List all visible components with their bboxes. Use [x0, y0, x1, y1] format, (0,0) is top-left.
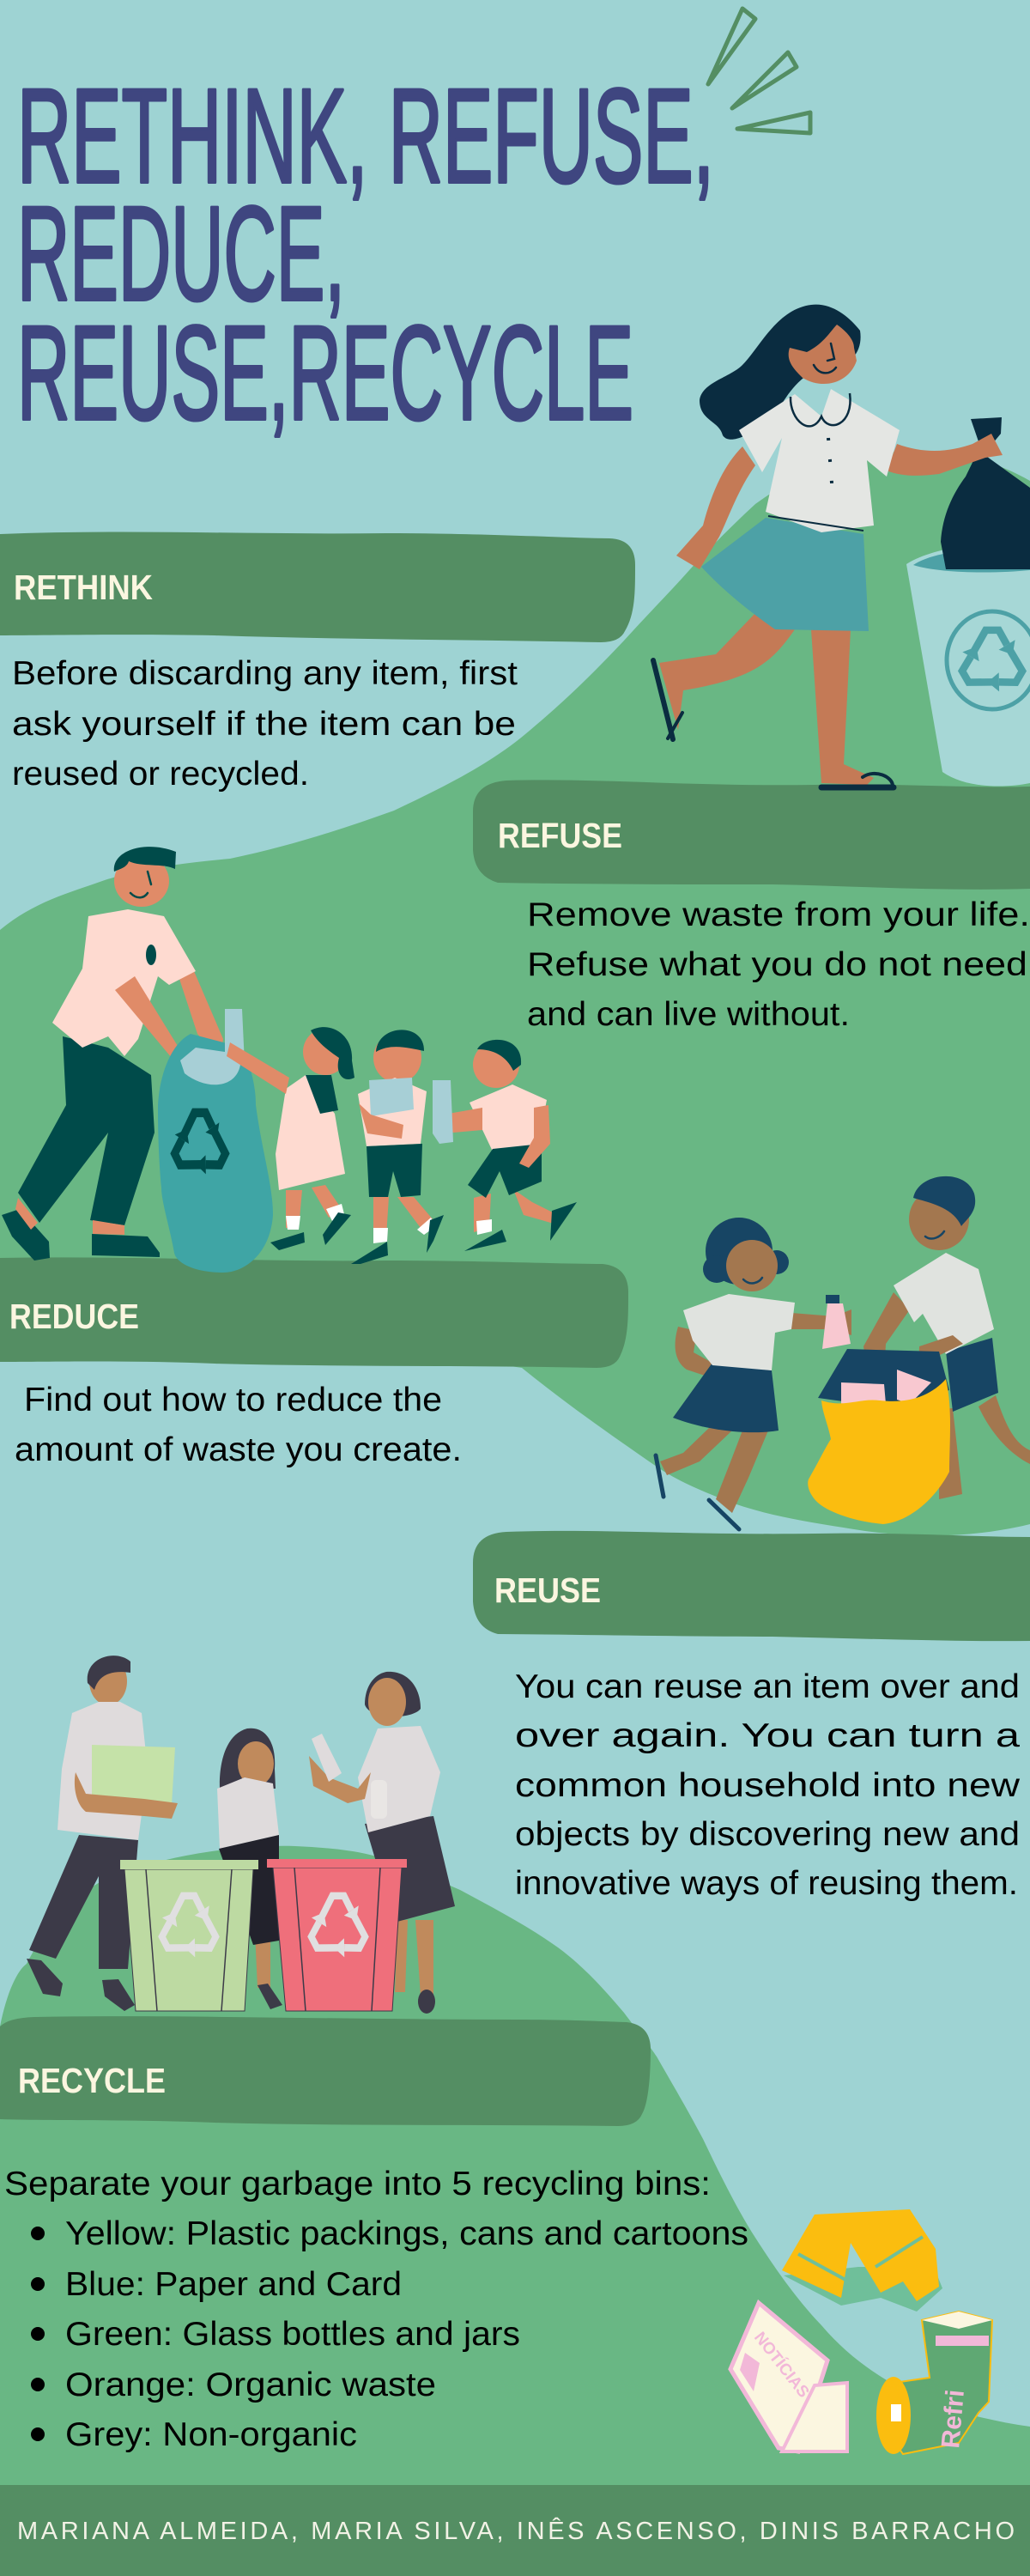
reduce label: REDUCE	[9, 1297, 139, 1336]
rethink text: reused or recycled.	[12, 756, 309, 793]
rethink bar	[0, 532, 635, 642]
panel: refuse	[473, 780, 1030, 1033]
panel: reduce	[0, 1257, 628, 1468]
illustration: children filling yellow bag	[656, 1176, 1030, 1529]
bullet list of bins: Green: Glass bottles and jars	[65, 2316, 520, 2353]
refuse text: Refuse what you do not need	[527, 946, 1027, 983]
girl	[656, 1218, 851, 1529]
recycle label: RECYCLE	[18, 2061, 166, 2100]
reuse text: common household into new	[515, 1767, 1021, 1804]
reuse text: innovative ways of reusing them.	[515, 1865, 1018, 1902]
boy	[863, 1176, 1030, 1499]
bullet list of bins: Yellow: Plastic packings, cans and cartoons	[65, 2215, 748, 2252]
rethink label: RETHINK	[14, 568, 153, 607]
illustration: people sorting into bins	[27, 1656, 455, 2014]
illustration: girl with trash bag and bin	[653, 305, 1030, 787]
yellow bottle	[782, 2209, 942, 2312]
title	[17, 62, 714, 448]
green hill: upper	[0, 451, 1030, 1535]
man	[2, 847, 223, 1261]
refuse text	[527, 896, 1030, 1033]
green bin	[120, 1860, 258, 2011]
reduce text	[15, 1382, 462, 1468]
reuse text: You can reuse an item over and	[515, 1668, 1020, 1705]
girl child	[227, 1027, 354, 1250]
small girl	[217, 1728, 282, 2009]
refuse text: and can live without.	[527, 996, 850, 1033]
red bin	[267, 1859, 407, 2011]
bullet list of bins: Orange: Organic waste	[65, 2366, 436, 2403]
reduce text: amount of waste you create.	[15, 1431, 462, 1468]
woman	[309, 1672, 455, 2014]
recycle bar	[0, 2016, 651, 2126]
panel: reuse	[473, 1531, 1030, 1902]
reuse text	[515, 1668, 1021, 1902]
recycling bin	[906, 543, 1030, 787]
newspaper: NOTÍCIAS	[750, 2329, 813, 2402]
panel: rethink	[0, 532, 635, 793]
bullet list of bins	[31, 2215, 748, 2453]
illustration: crushed bottle, newspaper and can	[730, 2209, 992, 2454]
skirt	[701, 518, 869, 631]
newspaper	[730, 2303, 847, 2451]
boy child with bottles	[351, 1030, 444, 1264]
panel: recycle	[0, 2016, 748, 2453]
boy child running	[433, 1040, 577, 1251]
title: REDUCE,	[17, 179, 345, 329]
blouse	[739, 389, 900, 532]
sandals	[653, 660, 894, 787]
bullet list of bins: Blue: Paper and Card	[65, 2266, 402, 2303]
yellow bag	[808, 1349, 950, 1524]
face	[814, 343, 836, 373]
hair	[700, 305, 861, 440]
pink bottle	[822, 1303, 851, 1349]
rethink text: Before discarding any item, first	[12, 655, 518, 692]
trash bag	[941, 417, 1030, 569]
soda can: Refri	[936, 2389, 970, 2450]
head	[789, 325, 857, 384]
limbs	[659, 613, 795, 730]
authors credit: MARIANA ALMEIDA, MARIA SILVA, INÊS ASCENSO, DINIS BARRACHO	[17, 2517, 1015, 2545]
refuse text: Remove waste from your life.	[527, 896, 1030, 933]
green hill: lower	[0, 1846, 1030, 2485]
reduce bar	[0, 1257, 628, 1368]
man with papers	[27, 1656, 178, 2011]
illustration: man and children collecting bottles	[2, 847, 577, 1273]
teal recycling bag	[158, 1009, 273, 1273]
icon: title sparks	[708, 9, 810, 133]
reuse text: objects by discovering new and	[515, 1816, 1020, 1853]
soda can	[876, 2312, 992, 2454]
reuse label: REUSE	[494, 1571, 601, 1610]
reduce text: Find out how to reduce the	[24, 1382, 442, 1419]
footer bar	[0, 2485, 1030, 2576]
refuse label: REFUSE	[498, 816, 622, 855]
rethink text: ask yourself if the item can be	[12, 706, 516, 743]
reuse bar	[473, 1531, 1030, 1641]
refuse bar	[473, 780, 1030, 890]
recycle intro text: Separate your garbage into 5 recycling bins:	[4, 2166, 711, 2202]
rethink text	[12, 655, 518, 793]
bullet list of bins: Grey: Non-organic	[65, 2416, 357, 2453]
reuse text: over again. You can turn a	[515, 1717, 1020, 1754]
